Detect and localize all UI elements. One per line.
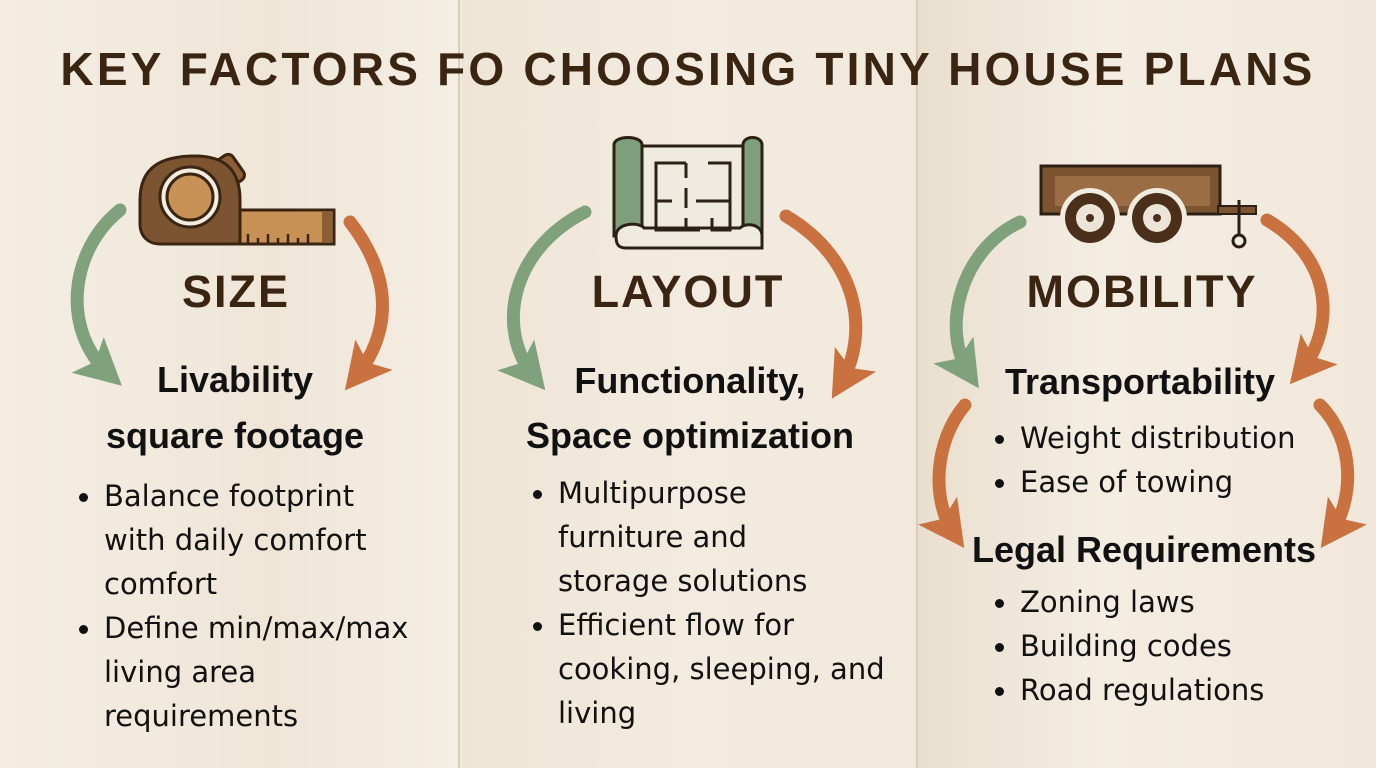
bullets: layout bbox=[533, 476, 885, 730]
icon: trailer bbox=[1040, 164, 1257, 248]
subheading: functionality: Functionality, bbox=[574, 360, 806, 401]
subheading: livability bbox=[106, 359, 364, 456]
bullets: legal bbox=[995, 585, 1264, 707]
icon: tape measure bbox=[138, 152, 336, 246]
bullets: size bbox=[79, 479, 408, 733]
bullets: layout: storage solutions bbox=[558, 564, 807, 598]
heading: MOBILITY: MOBILITY bbox=[1026, 266, 1257, 317]
icon: blueprint bbox=[612, 136, 764, 250]
subheading: legal: Legal Requirements bbox=[972, 529, 1316, 570]
title: KEY FACTORS FO CHOOSING TINY HOUSE PLANS bbox=[60, 43, 1316, 95]
bullets: size: comfort bbox=[104, 567, 217, 601]
bullets: legal: Road regulations bbox=[1020, 673, 1264, 707]
bullets: legal: Zoning laws bbox=[1020, 585, 1195, 619]
bullets: size: living area bbox=[104, 655, 256, 689]
subheading: functionality: Space optimization bbox=[526, 415, 854, 456]
bullets: size: with daily comfort bbox=[104, 523, 367, 557]
column: size bbox=[79, 266, 408, 733]
bullets: layout: cooking, sleeping, and bbox=[558, 652, 885, 686]
subheading: livability: Livability bbox=[157, 359, 313, 400]
subheading: livability: square footage bbox=[106, 415, 364, 456]
bullets: layout: furniture and bbox=[558, 520, 747, 554]
subheading: functionality bbox=[526, 360, 854, 456]
heading: SIZE: SIZE bbox=[182, 266, 290, 317]
bullets: layout: Multipurpose bbox=[558, 476, 747, 510]
bullets: layout: Efficient flow for bbox=[558, 608, 794, 642]
subheading: transportability: Transportability bbox=[1005, 361, 1275, 402]
bullets: transport: Weight distribution bbox=[1020, 421, 1296, 455]
column: layout bbox=[526, 266, 885, 730]
bullets: layout: living bbox=[558, 696, 636, 730]
bullets: size: Balance footprint bbox=[104, 479, 354, 513]
bullets: size: requirements bbox=[104, 699, 298, 733]
bullets: transport: Ease of towing bbox=[1020, 465, 1233, 499]
heading: LAYOUT: LAYOUT bbox=[592, 266, 784, 317]
bullets: size: Define min/max/max bbox=[104, 611, 408, 645]
column: mobility bbox=[972, 266, 1316, 707]
bullets: transport bbox=[995, 421, 1296, 499]
bullets: legal: Building codes bbox=[1020, 629, 1232, 663]
